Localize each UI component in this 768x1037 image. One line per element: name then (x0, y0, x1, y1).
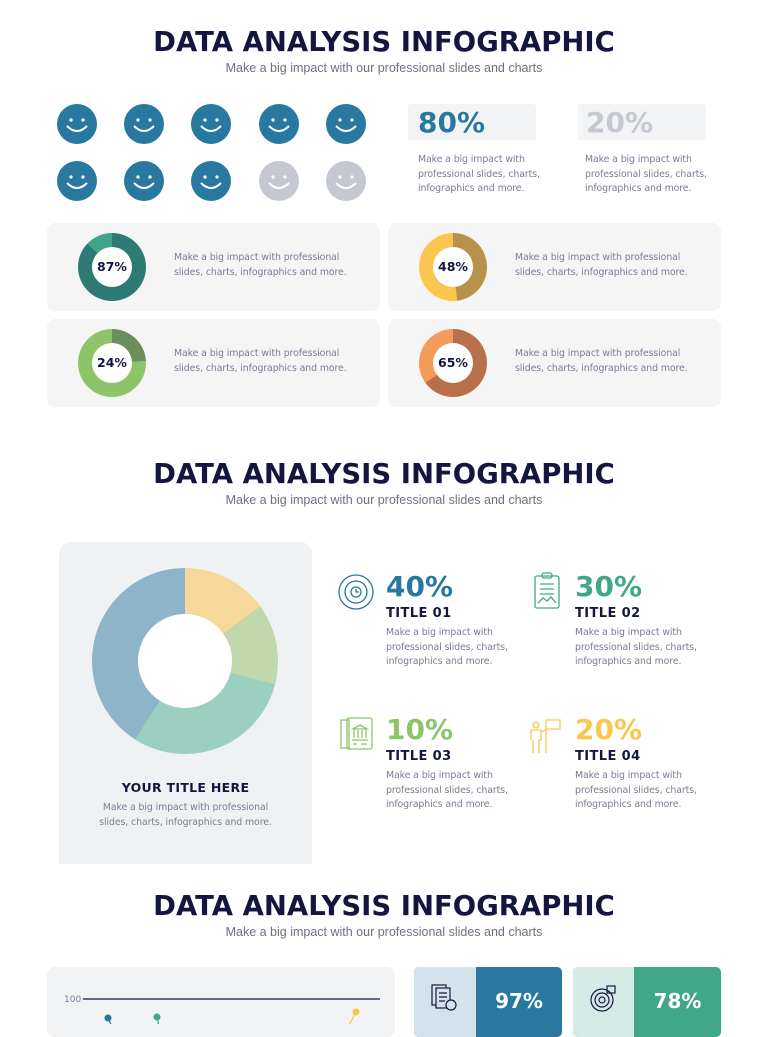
item 02: professional slides, charts, (575, 642, 697, 652)
stat box 78% (573, 967, 721, 1037)
item 04: Make a big impact with (575, 770, 682, 781)
item 03: TITLE 03 (386, 749, 452, 764)
stat 80%: Make a big impact with (418, 154, 525, 165)
stat 20% (578, 104, 707, 194)
card 65%: slides, charts, infographics and more. (515, 362, 688, 374)
item 01: TITLE 01 (386, 606, 452, 621)
item 04: infographics and more. (575, 799, 681, 810)
item 04: TITLE 04 (575, 749, 641, 764)
stat 80%: professional slides, charts, (418, 168, 540, 180)
icon: gear (338, 574, 374, 610)
stat 20%: Make a big impact with (585, 154, 692, 165)
title 2: DATA ANALYSIS INFOGRAPHIC (153, 458, 615, 490)
title 3: DATA ANALYSIS INFOGRAPHIC (153, 890, 615, 922)
card 24%: slides, charts, infographics and more. (174, 362, 347, 374)
subtitle 3: Make a big impact with our professional slides and charts (226, 925, 542, 939)
stat 20%: 20% (586, 106, 653, 139)
icon: bank document (340, 717, 373, 750)
panel: line chart: 100 (64, 995, 81, 1005)
item 02: 30% (575, 570, 642, 603)
item 03: 10% (386, 713, 453, 746)
item 03: professional slides, charts, (386, 784, 508, 796)
item 04: 20% (575, 713, 642, 746)
icon: documents (431, 984, 457, 1011)
card 87% (47, 223, 380, 311)
item 04: professional slides, charts, (575, 784, 697, 796)
item 01: infographics and more. (386, 656, 492, 667)
panel: donut chart (59, 542, 312, 864)
panel text (99, 802, 272, 828)
item 02: TITLE 02 (575, 606, 641, 621)
stat 20%: infographics and more. (585, 183, 691, 194)
icon: clipboard (534, 572, 560, 609)
subtitle 1: Make a big impact with our professional slides and charts (226, 61, 542, 75)
stat 80%: infographics and more. (418, 183, 524, 194)
item 02: infographics and more. (575, 656, 681, 667)
item 01: professional slides, charts, (386, 642, 508, 652)
card 87%: Make a big impact with professional (174, 252, 339, 263)
icon: person with flag (530, 719, 561, 753)
title 1: DATA ANALYSIS INFOGRAPHIC (153, 26, 615, 58)
item 01: Make a big impact with (386, 627, 493, 638)
card 24% (47, 319, 380, 407)
item 01 (338, 570, 508, 667)
card 48%: 48% (438, 259, 468, 274)
item 02: Make a big impact with (575, 627, 682, 638)
stat box 97%: 97% (495, 989, 543, 1013)
stat 80% (408, 104, 540, 194)
stat 20%: professional slides, charts, (585, 168, 707, 180)
card 48% (388, 223, 721, 311)
card 65%: 65% (438, 355, 468, 370)
subtitle 2: Make a big impact with our professional slides and charts (226, 493, 542, 507)
stat 80%: 80% (418, 106, 485, 139)
panel text: Make a big impact with professional (103, 802, 268, 813)
card 48%: Make a big impact with professional (515, 252, 680, 263)
item 03 (340, 713, 508, 810)
item 01: 40% (386, 570, 453, 603)
donut pie (92, 568, 278, 754)
card 48%: slides, charts, infographics and more. (515, 266, 688, 278)
icon: target (590, 985, 616, 1012)
item 02 (534, 570, 697, 667)
stat box 78%: 78% (654, 989, 701, 1013)
card 87%: 87% (97, 259, 127, 274)
item 04 (530, 713, 697, 810)
card 65% (388, 319, 721, 407)
panel: line chart (47, 967, 395, 1037)
panel text: slides, charts, infographics and more. (99, 816, 272, 828)
item 03: Make a big impact with (386, 770, 493, 781)
card 87%: slides, charts, infographics and more. (174, 266, 347, 278)
stat box 97% (414, 967, 562, 1037)
item 03: infographics and more. (386, 799, 492, 810)
card 24%: 24% (97, 355, 127, 370)
card 65%: Make a big impact with professional (515, 348, 680, 359)
smiley grid (57, 104, 366, 201)
panel title: YOUR TITLE HERE (122, 780, 249, 795)
card 24%: Make a big impact with professional (174, 348, 339, 359)
